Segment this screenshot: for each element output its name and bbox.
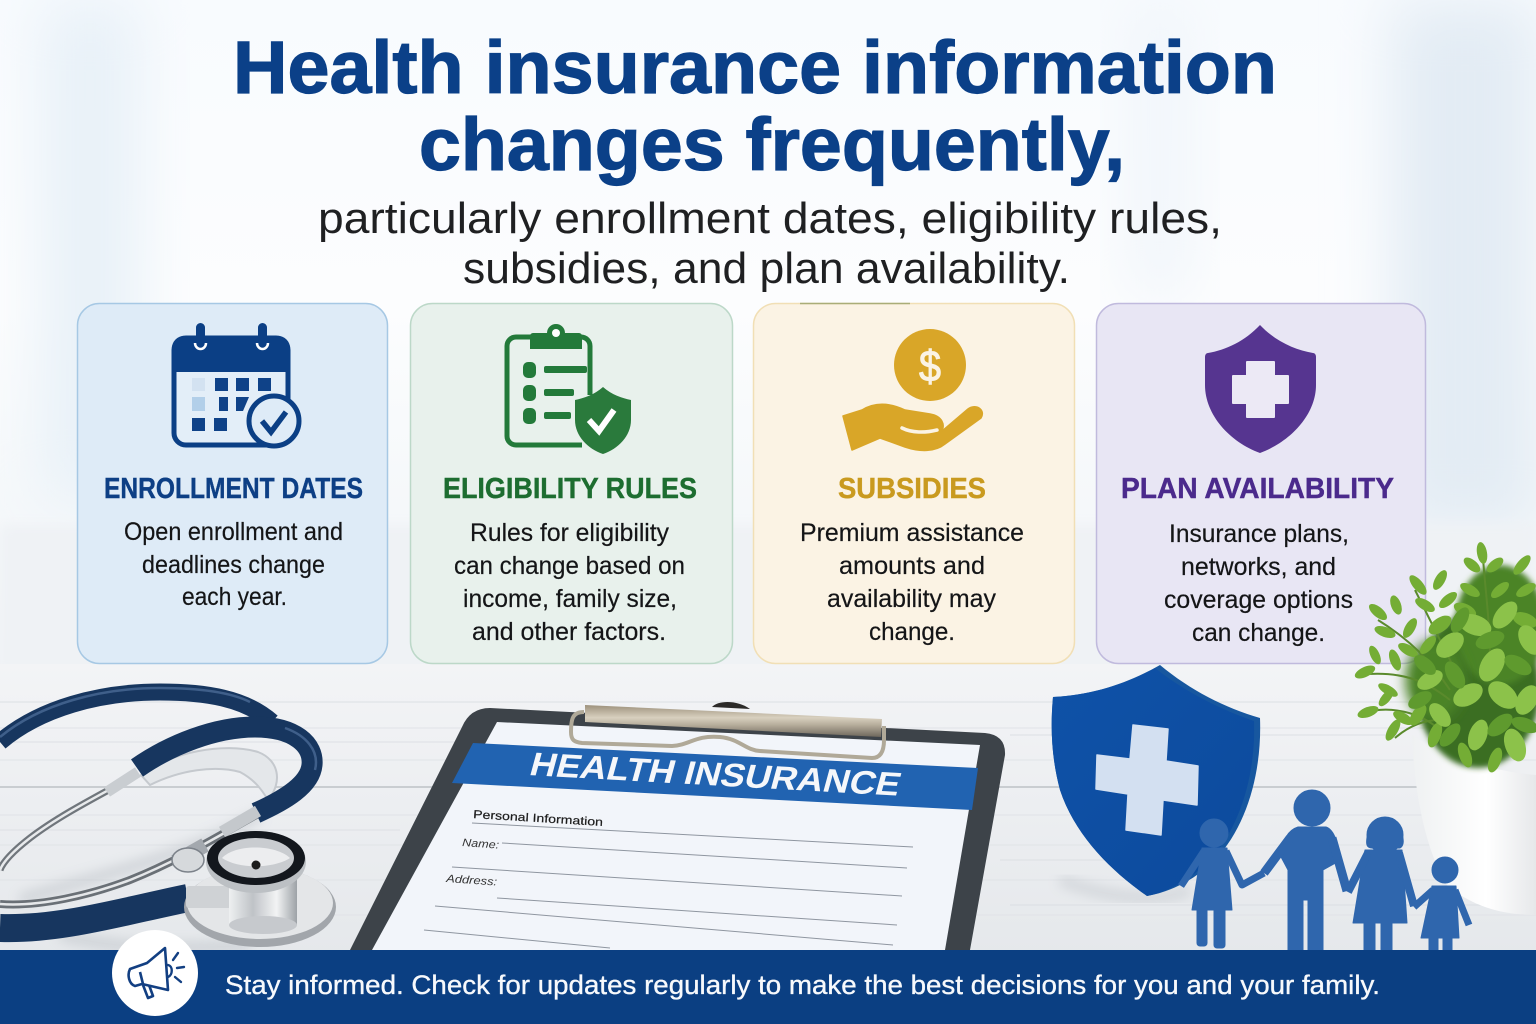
text: subsidies description: availability may (827, 585, 996, 613)
father (1264, 790, 1347, 950)
subtitle: subsidies, and plan availability. (463, 244, 1070, 293)
text: subsidies description: Premium assistance (800, 519, 1024, 547)
subtitle (318, 194, 1222, 293)
text: plan availability description (1164, 520, 1353, 647)
icon: clipboard with shield (507, 324, 631, 454)
heading: subsidies: SUBSIDIES (838, 473, 986, 505)
form labels and lines: Address: (445, 873, 498, 889)
background: soft wall (0, 0, 1536, 680)
text: eligibility rules description (454, 519, 685, 646)
text: eligibility rules description: Rules for eligibility (470, 519, 669, 547)
text: eligibility rules description: can change based on (454, 552, 685, 580)
illustration: clipboard (350, 702, 1005, 950)
icon: hand holding coin (843, 329, 982, 450)
illustration: paper family cutouts (1181, 790, 1469, 950)
child right (1414, 857, 1469, 950)
illustration: green plant (1353, 541, 1536, 774)
text: enrollment dates description: each year. (182, 583, 287, 611)
mother (1348, 817, 1414, 950)
child left (1181, 819, 1264, 948)
text: subsidies description: change. (869, 618, 955, 646)
subtitle: particularly enrollment dates, eligibility rules, (318, 194, 1222, 243)
form header text: HEALTH INSURANCE (526, 747, 905, 803)
text: enrollment dates description: deadlines change (142, 551, 325, 579)
icon: hand holding coin: $ (919, 342, 941, 391)
heading: plan availability: PLAN AVAILABILITY (1121, 473, 1394, 505)
form header band (452, 743, 978, 810)
text: eligibility rules description: and other factors. (472, 618, 666, 646)
form labels and lines: Personal Information (473, 809, 603, 829)
panel: subsidies (754, 304, 1074, 664)
text: eligibility rules description: income, family size, (463, 585, 677, 613)
text: plan availability description: networks, and (1181, 553, 1336, 581)
title: Health insurance information (233, 26, 1277, 109)
text: enrollment dates description: Open enrollment and (124, 518, 343, 546)
panel: enrollment dates (78, 304, 388, 664)
illustration: plant pot (1412, 735, 1536, 915)
footer banner (0, 950, 1536, 1024)
text: plan availability description: can change. (1192, 619, 1325, 647)
chest piece (184, 831, 336, 947)
icon: megaphone in white circle (112, 930, 198, 1016)
background: white wooden table (0, 664, 1536, 954)
illustration: blue shield with cross (1052, 665, 1260, 897)
clipboard clip (571, 702, 884, 758)
footer message: Stay informed. Check for updates regularly to make the best decisions for you and your family. (225, 970, 1380, 1000)
title: changes frequently, (419, 103, 1125, 186)
text: enrollment dates description (124, 518, 343, 611)
icon: calendar with check (172, 323, 299, 446)
icon: purple shield with cross (1205, 325, 1316, 453)
form labels and lines (424, 809, 913, 948)
panel: plan availability (1096, 304, 1426, 664)
text: plan availability description: Insurance plans, (1169, 520, 1349, 548)
heading: eligibility rules: ELIGIBILITY RULES (443, 473, 697, 505)
form labels and lines: Name: (462, 837, 500, 852)
text: subsidies description (800, 519, 1024, 646)
text: subsidies description: amounts and (839, 552, 985, 580)
panel: eligibility rules (410, 304, 732, 664)
heading: enrollment dates: ENROLLMENT DATES (104, 473, 363, 505)
title (233, 26, 1277, 186)
text: plan availability description: coverage options (1164, 586, 1353, 614)
illustration: stethoscope (0, 688, 336, 948)
